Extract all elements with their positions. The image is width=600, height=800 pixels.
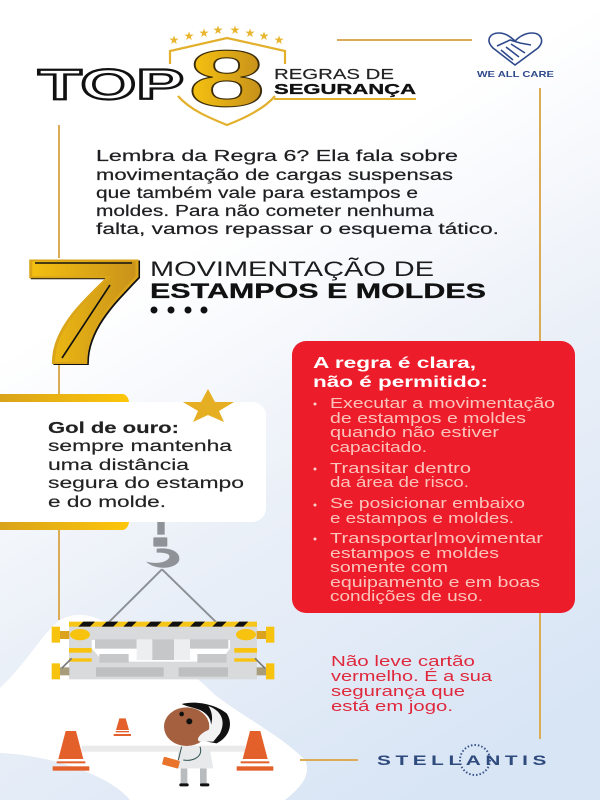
segurança: SEGURANÇA — [274, 81, 416, 98]
closing red message: está em jogo. — [331, 699, 453, 715]
heart handshake icon — [489, 33, 542, 65]
rule heading: ESTAMPOS E MOLDES — [150, 280, 486, 303]
shield outline — [170, 38, 285, 125]
rule list text: quando não estiver — [330, 425, 499, 441]
gold goal callout — [0, 389, 266, 530]
rule bullets — [314, 402, 316, 540]
stars row: ★ — [213, 23, 223, 37]
rule list text: da área de risco. — [330, 475, 469, 491]
panel heading — [313, 355, 488, 391]
stellantis logo: STELLANTIS — [377, 753, 551, 768]
rule list text: estampos e moldes — [330, 546, 499, 562]
gold frame lines — [59, 40, 540, 760]
red rules panel — [292, 341, 575, 613]
intro text: falta, vamos repassar o esquema tático. — [96, 221, 499, 238]
rule heading — [150, 257, 486, 314]
callout text: Gol de ouro: — [48, 420, 179, 437]
intro text: Lembra da Regra 6? Ela fala sobre — [96, 148, 458, 165]
white panel — [0, 402, 266, 522]
stars row — [169, 23, 284, 47]
regras de: REGRAS DE — [274, 67, 394, 83]
hook — [146, 522, 179, 568]
callout text — [48, 420, 244, 511]
panel heading: não é permitido: — [313, 374, 488, 391]
slings — [108, 569, 217, 623]
underline — [274, 98, 416, 100]
white ground shape — [0, 615, 307, 800]
closing red message: vermelho. É a sua — [331, 668, 493, 685]
worker — [162, 703, 230, 786]
stars row: ★ — [230, 23, 240, 37]
rule list text: Se posicionar embaixo — [330, 496, 525, 512]
gold bars — [0, 394, 129, 403]
closing red message — [331, 654, 493, 715]
mould body — [69, 626, 257, 679]
rule list text: Transportar|movimentar — [330, 531, 543, 547]
stars row: ★ — [199, 26, 209, 40]
stars row: ★ — [259, 29, 269, 43]
rule list text: e estampos e moldes. — [330, 511, 514, 527]
big number 7: 7 — [21, 228, 147, 395]
closing red message: segurança que — [331, 684, 465, 700]
callout text: sempre mantenha — [48, 438, 233, 455]
intro text — [96, 148, 499, 238]
barrier bar — [82, 746, 245, 752]
stellantis logo — [377, 745, 551, 775]
stars row: ★ — [184, 29, 194, 43]
header: top 8 regras de segurança — [38, 23, 416, 125]
stars row: ★ — [169, 33, 179, 47]
rule list text: Executar a movimentação — [330, 396, 555, 412]
callout text: uma distância — [48, 457, 190, 474]
logo: we all care — [477, 33, 554, 79]
rule list text — [330, 396, 555, 605]
stars row: ★ — [274, 33, 284, 47]
rule list text: de estampos e moldes — [330, 411, 526, 427]
rule list text: condições de uso. — [330, 589, 483, 605]
big number 8: 8 — [188, 34, 265, 124]
rule heading: MOVIMENTAÇÃO DE — [150, 257, 434, 281]
star icon — [183, 389, 234, 422]
rule list text: equipamento e em boas — [330, 575, 540, 591]
rule list text: somente com — [330, 560, 448, 576]
intro text: movimentação de cargas suspensas — [96, 167, 453, 184]
we all care label: WE ALL CARE — [477, 69, 554, 79]
traffic cones — [53, 718, 273, 771]
intro text: que também vale para estampos e — [96, 185, 418, 202]
rule list text: capacitado. — [330, 440, 427, 456]
stars row: ★ — [245, 26, 255, 40]
crane illustration — [52, 522, 274, 786]
TOP outlined text: TOP — [38, 61, 184, 109]
yellow clamps — [52, 627, 274, 679]
four dots — [150, 306, 208, 314]
callout text: segura do estampo — [48, 475, 244, 492]
intro text: moldes. Para não cometer nenhuma — [96, 203, 434, 220]
rule list text: Transitar dentro — [330, 461, 471, 477]
callout text: e do molde. — [48, 494, 166, 511]
panel heading: A regra é clara, — [313, 355, 476, 372]
hazard stripe — [69, 622, 257, 627]
closing red message: Não leve cartão — [331, 654, 475, 670]
